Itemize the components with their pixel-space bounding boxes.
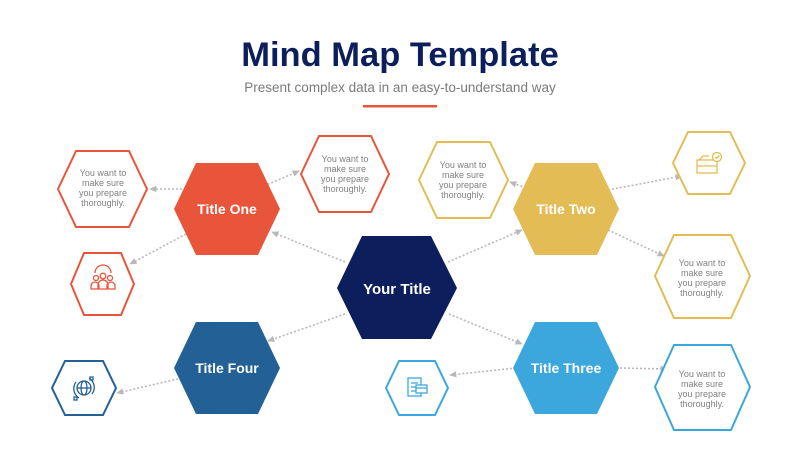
icon hex: document card xyxy=(386,361,448,415)
text hex: two-left: make sure xyxy=(442,170,484,180)
text hex: one-right: thoroughly. xyxy=(323,184,367,194)
hex: Your Title: Your Title xyxy=(363,281,431,298)
text hex: two-right: You want to xyxy=(679,258,725,268)
text hex: one-right: You want to xyxy=(322,154,368,164)
icon hex: globe xyxy=(52,361,116,415)
text hex: two-left: You want to xyxy=(440,160,486,170)
text hex: two-right: thoroughly. xyxy=(680,288,724,298)
hex: Title Four: Title Four xyxy=(195,360,259,376)
text hex: three-right xyxy=(655,345,750,430)
icon hex: people xyxy=(71,253,134,315)
text hex: three-right: make sure xyxy=(681,379,723,389)
subtitle: Present complex data in an easy-to-understand way xyxy=(244,80,556,95)
text hex: two-left: you prepare xyxy=(439,180,487,190)
text hex: two-left: thoroughly. xyxy=(441,190,485,200)
text hex: one-left: you prepare xyxy=(79,188,127,198)
text hex: one-right: you prepare xyxy=(321,174,369,184)
text hex: two-right xyxy=(655,235,750,318)
text hex: one-left: thoroughly. xyxy=(81,198,125,208)
text hex: one-left: You want to xyxy=(80,168,126,178)
text hex: one-right xyxy=(301,136,389,212)
hex: Title Two xyxy=(513,163,619,255)
text hex: one-right: make sure xyxy=(324,164,366,174)
accent underline xyxy=(363,105,437,108)
hex: Title Two: Title Two xyxy=(536,201,596,217)
text hex: one-left xyxy=(58,151,147,227)
hex: Title Three xyxy=(513,322,619,414)
hex: Title Three: Title Three xyxy=(531,360,601,376)
text hex: two-right: you prepare xyxy=(678,278,726,288)
hex: Title One: Title One xyxy=(197,201,257,217)
hex: Title Four xyxy=(174,322,280,414)
hex: Title One xyxy=(174,163,280,255)
connectors xyxy=(117,171,682,393)
text hex: two-left xyxy=(419,142,508,218)
text hex: three-right: You want to xyxy=(679,369,725,379)
text hex: three-right: you prepare xyxy=(678,389,726,399)
text hex: three-right: thoroughly. xyxy=(680,399,724,409)
text hex: one-left: make sure xyxy=(82,178,124,188)
icon hex: wallet xyxy=(673,132,745,194)
title: Mind Map Template xyxy=(241,36,559,74)
hex: Your Title xyxy=(337,236,457,339)
text hex: two-right: make sure xyxy=(681,268,723,278)
